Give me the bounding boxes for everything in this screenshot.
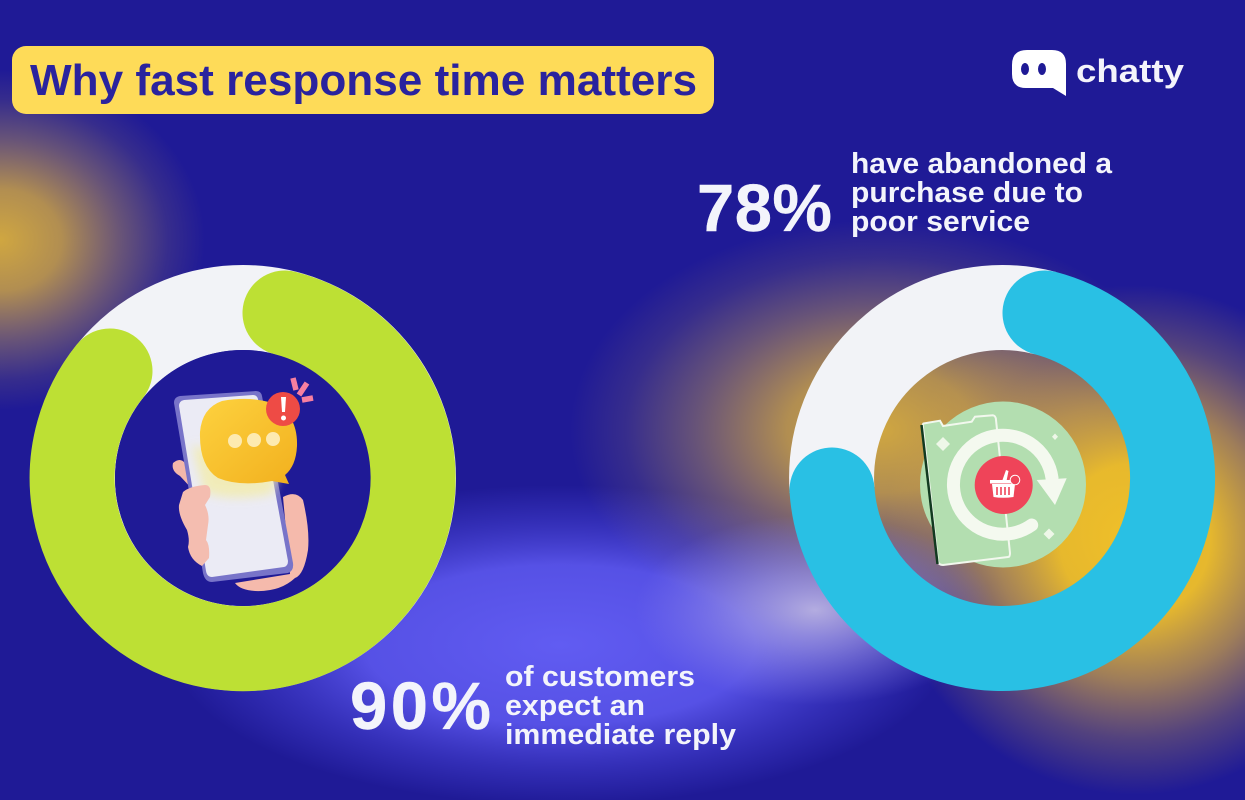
- fingers: [179, 485, 210, 566]
- stat: 90 percent: [350, 661, 736, 751]
- donut chart: 90 percent: [72, 308, 413, 649]
- palm: [235, 494, 308, 591]
- stat text: abandoned purchase: poor service: [851, 206, 1030, 238]
- phone dark edge: [922, 425, 938, 564]
- stat text: abandoned purchase: [851, 148, 1113, 238]
- stat text: customers expect reply: [505, 661, 736, 751]
- stat text: customers expect reply: immediate reply: [505, 719, 736, 751]
- logo: chatty: chatty: [1076, 53, 1184, 89]
- stat text: customers expect reply: of customers: [505, 661, 695, 693]
- basket badge: [975, 456, 1033, 514]
- finger tip behind phone: [173, 460, 193, 490]
- icon: hand holding phone with chat bubble: [173, 378, 313, 591]
- alert badge: [266, 392, 300, 426]
- donut chart: 78 percent: [832, 308, 1173, 649]
- icon: phone with basket and return arrow: [920, 402, 1086, 568]
- stat text: abandoned purchase: purchase due to: [851, 177, 1083, 209]
- title: Why fast response time matters: [30, 56, 697, 105]
- return arrow: [953, 435, 1067, 534]
- sparkles: [936, 434, 1058, 540]
- bubble shadow on screen: [192, 445, 280, 498]
- chat bubble: [200, 399, 297, 484]
- stat text: abandoned purchase: have abandoned a: [851, 148, 1113, 180]
- alert rays: [293, 378, 313, 400]
- stat: 90 percent: 90%: [350, 669, 491, 744]
- phone: [174, 391, 293, 582]
- stat: 78 percent: [697, 148, 1113, 246]
- stat text: customers expect reply: expect an: [505, 690, 645, 722]
- icon: speech bubble: [1012, 50, 1066, 96]
- phone outline: [923, 415, 1010, 565]
- title: [12, 46, 714, 114]
- logo: chatty: [1012, 50, 1184, 96]
- stat: 78 percent: 78%: [697, 171, 832, 246]
